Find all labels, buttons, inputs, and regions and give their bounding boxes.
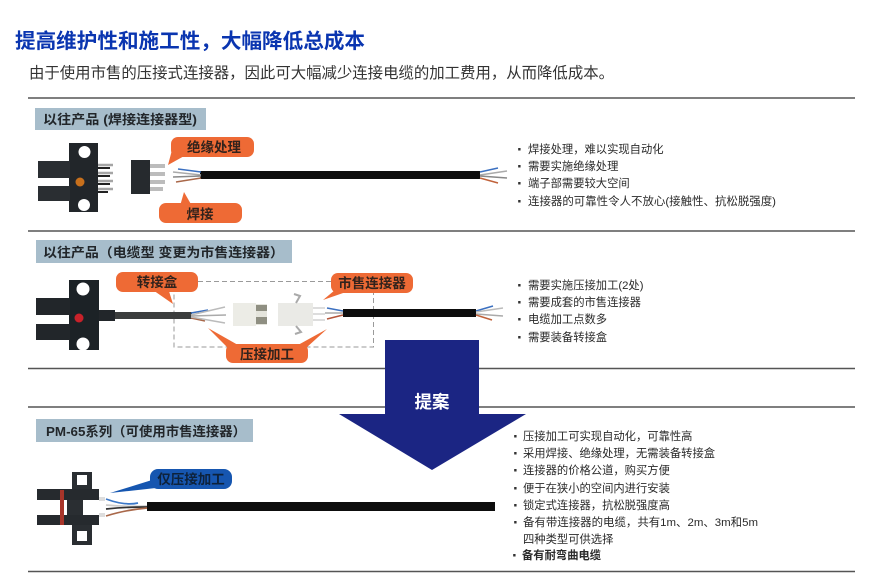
text block: PM-65 benefits: 采用焊接、绝缘处理，无需装备转接盒 [523, 446, 715, 460]
text block: PM-65 benefits: 备有耐弯曲电缆 [522, 548, 602, 562]
text block: cable type drawbacks: · [517, 328, 523, 347]
text block: PM-65 benefits: · [513, 513, 519, 532]
callout: crimping [208, 328, 327, 363]
cable with connector-side wires [325, 306, 503, 320]
callout: junction box: 转接盒 [137, 274, 178, 290]
icon: sensor with pins [38, 143, 113, 212]
callout: commercial connector [323, 273, 413, 300]
text block: soldered connector drawbacks: 连接器的可靠性令人不放心(接触性、抗松脱强度) [528, 194, 776, 208]
dashed junction frame [174, 282, 374, 347]
text block: PM-65 benefits: · [513, 496, 519, 515]
cable with lead wires [106, 499, 495, 516]
cable with stripped wires [173, 168, 507, 183]
text block: soldered connector drawbacks [517, 140, 776, 211]
text block: PM-65 benefits: · [512, 546, 518, 565]
text block: PM-65 benefits: 备有带连接器的电缆，共有1m、2m、3m和5m [523, 515, 758, 529]
heading: PM-65 series: PM-65系列（可使用市售连接器） [46, 424, 246, 439]
text block: PM-65 benefits: · [513, 461, 519, 480]
text block: cable type drawbacks: 需要装备转接盒 [528, 330, 607, 344]
heading: cable type: 以往产品（电缆型 变更为市售连接器） [43, 245, 284, 260]
heading: cable type [36, 240, 292, 263]
callout: crimping only: 仅压接加工 [157, 472, 225, 487]
callout: crimping only [110, 469, 232, 493]
text block: PM-65 benefits: 锁定式连接器，抗松脱强度高 [523, 498, 670, 512]
text block: soldered connector drawbacks: · [517, 192, 523, 211]
icon: sensor with cable [36, 280, 226, 350]
icon: commercial connector plug [233, 303, 267, 326]
text block: cable type drawbacks [517, 276, 644, 347]
text block: PM-65 benefits: 四种类型可供选择 [523, 532, 613, 546]
icon: connector block [131, 160, 165, 194]
text block: PM-65 benefits: 连接器的价格公道，购买方便 [523, 463, 670, 477]
callout: soldering: 焊接 [186, 207, 214, 222]
text block: cable type drawbacks: · [517, 276, 523, 295]
callout: soldering [159, 192, 242, 223]
text block: PM-65 benefits: · [513, 427, 519, 446]
heading: soldered connector type: 以往产品 (焊接连接器型) [43, 112, 197, 127]
text block: cable type drawbacks: 需要成套的市售连接器 [528, 295, 641, 309]
text block: soldered connector drawbacks: · [517, 140, 523, 159]
text block: PM-65 benefits: · [513, 479, 519, 498]
text block: soldered connector drawbacks: 焊接处理，难以实现自动化 [528, 142, 664, 156]
callout: junction box [116, 272, 198, 304]
icon: PM-65 sensor [37, 472, 105, 545]
text block: soldered connector drawbacks: · [517, 157, 523, 176]
text block: cable type drawbacks: 电缆加工点数多 [528, 312, 607, 326]
callout: insulation: 绝缘处理 [187, 139, 241, 155]
callout: commercial connector: 市售连接器 [338, 275, 406, 291]
text block: soldered connector drawbacks: · [517, 174, 523, 193]
heading: soldered connector type [35, 108, 206, 130]
text block: soldered connector drawbacks: 端子部需要较大空间 [528, 176, 630, 190]
text block: PM-65 benefits: 压接加工可实现自动化，可靠性高 [523, 429, 692, 443]
callout: crimping: 压接加工 [240, 347, 294, 362]
subtitle: 由于使用市售的压接式连接器，因此可大幅减少连接电缆的加工费用，从而降低成本。 [29, 65, 614, 82]
text block: PM-65 benefits: 便于在狭小的空间内进行安装 [523, 481, 670, 495]
text block: PM-65 benefits: · [513, 444, 519, 463]
panel: conventional cable type [36, 240, 503, 363]
text block: PM-65 benefits [512, 427, 758, 565]
callout: insulation [168, 137, 254, 165]
arrow: proposal [339, 340, 526, 470]
heading: PM-65 series [36, 419, 253, 442]
panel: PM-65 series [36, 419, 495, 545]
text block: cable type drawbacks: 需要实施压接加工(2处) [528, 278, 644, 292]
text block: soldered connector drawbacks: 需要实施绝缘处理 [528, 159, 618, 173]
panel: conventional soldered connector [35, 108, 507, 223]
text block: cable type drawbacks: · [517, 293, 523, 312]
arrow: proposal: 提案 [414, 392, 450, 412]
title: 提高维护性和施工性，大幅降低总成本 [15, 29, 365, 53]
icon: commercial connector socket [278, 294, 325, 334]
text block: cable type drawbacks: · [517, 310, 523, 329]
